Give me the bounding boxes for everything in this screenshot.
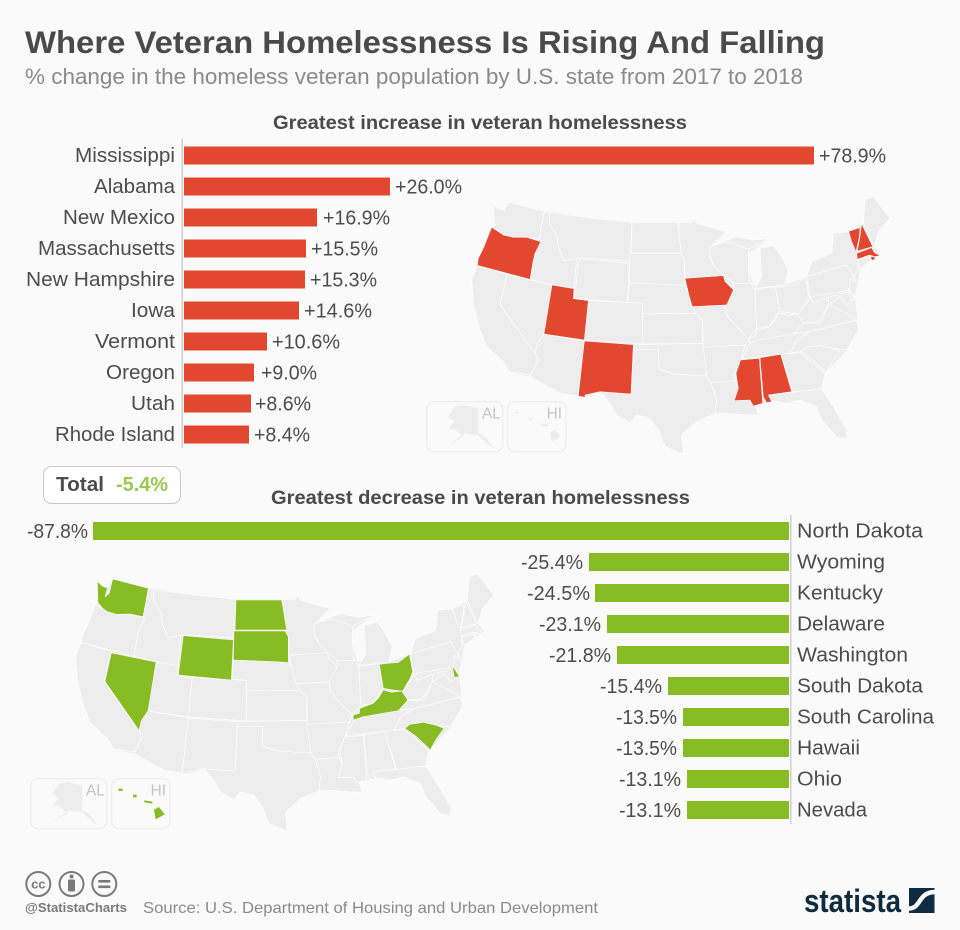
handle: @StatistaCharts [25, 900, 127, 915]
bar chart: greatest increase: +15.3% [310, 270, 377, 292]
logo: statista: statista [804, 883, 901, 919]
source: Source: U.S. Department of Housing and Urban Development [143, 900, 599, 917]
callout: total change: -5.4% [116, 474, 168, 496]
bar chart: greatest increase: Mississippi [75, 145, 175, 167]
bar chart: greatest decrease: Hawaii [797, 738, 860, 760]
bar chart: greatest increase: Utah [131, 393, 175, 415]
bar chart: greatest increase: +16.9% [323, 208, 390, 230]
icons: creative commons licence: cc [31, 876, 46, 892]
bar chart: greatest increase: New Hampshire [26, 269, 175, 291]
heading: greatest increase: Greatest increase in veteran homelessness [273, 113, 687, 134]
bar chart: greatest decrease: -87.8% [27, 521, 88, 543]
bar chart: greatest increase: +10.6% [272, 332, 340, 354]
bar chart: greatest increase: +14.6% [304, 300, 372, 322]
bar chart: greatest increase: +26.0% [395, 176, 462, 198]
bar chart: greatest increase: +15.5% [311, 238, 378, 260]
bar chart: greatest decrease: South Carolina [797, 706, 935, 728]
bar chart: greatest decrease: Ohio [797, 768, 842, 790]
callout: total change [44, 466, 180, 504]
heading: greatest decrease: Greatest decrease in veteran homelessness [271, 488, 690, 509]
callout: total change: Total [56, 474, 104, 496]
bar chart: greatest decrease: Kentucky [797, 582, 883, 604]
bar chart: greatest increase: +9.0% [261, 362, 317, 384]
bar chart: greatest increase: +78.9% [819, 146, 886, 168]
bar chart: greatest increase: Vermont [95, 331, 175, 353]
bar chart: greatest decrease: North Dakota [797, 520, 924, 542]
bar chart: greatest decrease: -15.4% [600, 676, 662, 698]
bar chart: greatest increase [26, 139, 886, 448]
bar chart: greatest decrease: -13.1% [619, 800, 681, 822]
bar chart: greatest decrease: -13.1% [619, 769, 681, 791]
bar chart: greatest increase: Rhode Island [55, 424, 175, 446]
bar chart: greatest decrease: -23.1% [539, 614, 601, 636]
bar chart: greatest decrease: -21.8% [549, 645, 611, 667]
bar chart: greatest decrease: Delaware [797, 614, 885, 636]
bar chart: greatest increase: New Mexico [63, 207, 175, 229]
title: Where Veteran Homelessness Is Rising And Falling [25, 24, 825, 60]
bar chart: greatest increase: +8.6% [255, 394, 311, 416]
bar chart: greatest increase: +8.4% [254, 424, 310, 446]
map: states with increase: HI [547, 406, 562, 423]
bar chart: greatest decrease: South Dakota [797, 676, 924, 698]
map: states with increase [426, 198, 890, 454]
bar chart: greatest increase: Iowa [131, 300, 176, 322]
bar chart: greatest decrease [27, 515, 935, 824]
map: states with decrease: HI [151, 783, 166, 800]
bar chart: greatest decrease: -24.5% [527, 583, 590, 605]
map: states with decrease: AL [86, 783, 105, 800]
bar chart: greatest decrease: Wyoming [797, 552, 885, 574]
bar chart: greatest decrease: Washington [797, 644, 908, 666]
bar chart: greatest decrease: -25.4% [521, 552, 583, 574]
map: states with decrease [30, 574, 494, 830]
bar chart: greatest increase: Alabama [94, 176, 176, 198]
subtitle: % change in the homeless veteran population by U.S. state from 2017 to 2018 [25, 64, 803, 89]
map: states with increase: AL [482, 406, 501, 423]
bar chart: greatest increase: Oregon [106, 362, 175, 384]
bar chart: greatest decrease: Nevada [797, 800, 868, 822]
bar chart: greatest increase: Massachusetts [38, 238, 175, 260]
bar chart: greatest decrease: -13.5% [616, 707, 677, 729]
icons: creative commons licence [26, 872, 116, 896]
bar chart: greatest decrease: -13.5% [616, 738, 677, 760]
